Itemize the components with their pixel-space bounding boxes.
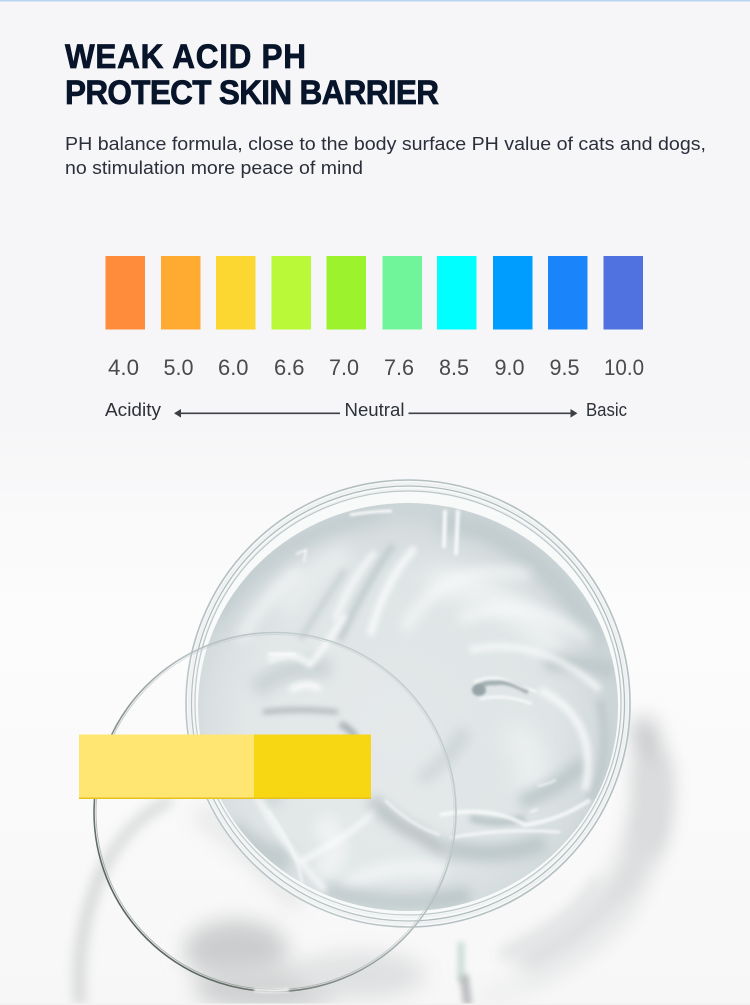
green reflection and wedge (458, 942, 464, 982)
description text: no stimulation more peace of mind (65, 158, 363, 178)
lid tint (94, 632, 456, 992)
lid bottom highlight (254, 990, 289, 991)
acidity to basic scale: Neutral (344, 400, 404, 420)
yellow test strip (79, 734, 371, 799)
acidity to basic scale: Basic (586, 400, 627, 420)
top edge line (0, 0, 750, 2)
central grey mass (184, 920, 288, 980)
lid shadow patches over water (263, 615, 445, 850)
pH values: 9.0 (494, 355, 524, 380)
pH values: 4.0 (108, 355, 139, 380)
pH values: 9.5 (550, 355, 580, 380)
bottom edge line (0, 1004, 750, 1005)
broad bright fields (280, 550, 560, 890)
pH values: 8.5 (439, 355, 469, 380)
pH values: 6.0 (218, 355, 248, 380)
dish water fill (198, 503, 618, 911)
title: WEAK ACID PH (65, 38, 306, 76)
right-bottom arcs (500, 880, 600, 955)
acidity to basic scale: Acidity (105, 400, 161, 420)
dish glass rims (186, 480, 630, 927)
cast shadows beneath the glass (79, 720, 653, 1005)
bright ripples (240, 548, 600, 900)
pH values: 10.0 (604, 355, 644, 380)
top glints (350, 511, 392, 515)
left shadow arc (79, 800, 172, 1005)
central swirl (476, 682, 528, 692)
water ripples (215, 510, 615, 902)
pH values: 6.6 (274, 355, 304, 380)
title (65, 38, 439, 112)
glass lid (94, 615, 456, 992)
petri dish with water (186, 480, 630, 927)
acidity to basic scale (105, 400, 627, 420)
description text (65, 134, 706, 178)
right shadow (640, 720, 653, 850)
lid ring (94, 632, 456, 992)
pH colour swatches (106, 256, 643, 330)
pH values: 7.0 (329, 355, 359, 380)
pH values: 7.6 (384, 355, 414, 380)
dish base (186, 480, 630, 927)
bright highlights (538, 780, 556, 786)
pH values: 5.0 (164, 355, 194, 380)
title: PROTECT SKIN BARRIER (65, 74, 439, 112)
pH values (108, 355, 644, 380)
description text: PH balance formula, close to the body surface PH value of cats and dogs, (65, 134, 706, 154)
broad dark areas (215, 515, 615, 902)
